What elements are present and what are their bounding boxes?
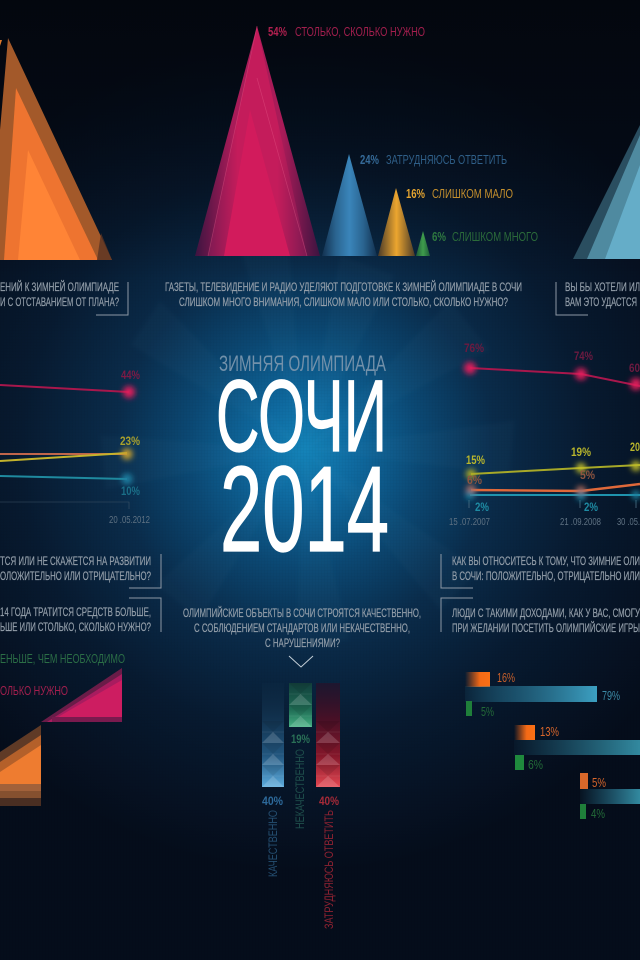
data labels: 23% <box>120 434 140 448</box>
chart: right blue triangle <box>573 125 640 259</box>
bar group: first: 16% <box>497 670 515 685</box>
question: left lower: ЬШЕ ИЛИ СТОЛЬКО, СКОЛЬКО НУЖНО? <box>0 620 151 634</box>
question: center lower: С СОБЛЮДЕНИЕМ СТАНДАРТОВ ИЛИ НЕКАЧЕСТВЕННО, <box>194 621 410 635</box>
line chart: right <box>449 341 640 528</box>
question: right middle <box>441 554 640 588</box>
bar: quality 40%: 40% <box>262 794 283 808</box>
label: 24%: 24% <box>360 152 379 167</box>
label: 16%: СЛИШКОМ МАЛО <box>432 186 513 201</box>
label: 24% <box>360 152 507 167</box>
data dots <box>122 386 135 484</box>
bar: quality 40% <box>262 683 284 877</box>
bar group: third: 4% <box>591 806 605 821</box>
bar: poor quality 19%: НЕКАЧЕСТВЕННО <box>293 749 307 829</box>
data labels: 19% <box>571 445 591 459</box>
label: 6%: СЛИШКОМ МНОГО <box>452 229 538 244</box>
question: right top <box>556 280 640 315</box>
bar: poor quality 19%: 19% <box>291 732 310 746</box>
bar: hard to say 40% <box>316 683 340 929</box>
bar group: third: 5% <box>592 775 606 790</box>
title <box>216 351 389 577</box>
label: 54%: 54% <box>268 24 287 39</box>
data labels: 10% <box>121 484 140 498</box>
chart: media coverage triangles <box>195 24 538 256</box>
label: 54%: СТОЛЬКО, СКОЛЬКО НУЖНО <box>295 24 425 39</box>
question: left top: ЕНИЙ К ЗИМНЕЙ ОЛИМПИАДЕ <box>0 279 119 294</box>
bar group: second <box>514 724 640 772</box>
date label: 20 .05.2012 <box>109 515 150 526</box>
date labels: 21 .09.2008 <box>560 517 601 528</box>
label: 16% <box>406 186 513 201</box>
bar group: first: 5% <box>481 704 494 719</box>
question: left middle: ОЛОЖИТЕЛЬНО ИЛИ ОТРИЦАТЕЛЬНО? <box>0 569 151 583</box>
triangle: 6% green <box>416 231 430 256</box>
bar: hard to say 40%: 40% <box>319 794 339 808</box>
label: as much as needed: ОЛЬКО НУЖНО <box>0 683 68 698</box>
question: left top: И С ОТСТАВАНИЕМ ОТ ПЛАНА? <box>0 295 119 309</box>
data labels: 44% <box>121 368 140 382</box>
label: 54% <box>268 24 425 39</box>
label: 6%: 6% <box>432 229 446 244</box>
question: left top <box>0 279 128 315</box>
question: center top <box>165 279 522 309</box>
bar group: second: 6% <box>528 757 543 772</box>
data labels: 5% <box>580 468 595 482</box>
date labels <box>449 517 640 528</box>
date labels: 15 .07.2007 <box>449 517 490 528</box>
triangle: 54% pink <box>195 26 320 256</box>
question: center lower: С НАРУШЕНИЯМИ? <box>265 636 340 650</box>
line chart: left <box>0 368 150 526</box>
data labels: 2% <box>475 500 489 514</box>
data labels: 2% <box>584 500 598 514</box>
bar group: second: 13% <box>540 724 559 739</box>
data labels <box>464 341 640 514</box>
data labels <box>120 368 140 498</box>
question: left middle <box>0 554 161 588</box>
chart: vertical bars <box>262 683 340 929</box>
bar: poor quality 19% <box>289 683 312 829</box>
data dots <box>464 362 640 500</box>
bar group: first <box>465 670 620 719</box>
label: 24%: ЗАТРУДНЯЮСЬ ОТВЕТИТЬ <box>386 152 507 167</box>
triangle: pink <box>41 668 122 722</box>
question: center lower <box>183 605 421 650</box>
chart: horizontal bars <box>465 670 640 821</box>
bar: hard to say 40%: ЗАТРУДНЯЮСЬ ОТВЕТИТЬ <box>322 810 336 929</box>
data labels: 15% <box>466 453 485 467</box>
bar group: first: 79% <box>602 688 620 703</box>
chart: left bottom triangles <box>0 651 125 806</box>
icon: chevron arrow <box>289 656 313 667</box>
data labels: 76% <box>464 341 484 355</box>
data labels: 74% <box>574 349 593 363</box>
question: left middle: ТСЯ ИЛИ НЕ СКАЖЕТСЯ НА РАЗВИТИИ <box>0 554 151 568</box>
triangle: orange <box>0 725 41 806</box>
title: ЗИМНЯЯ ОЛИМПИАДА <box>219 351 386 376</box>
label: less than necessary: ЕНЬШЕ, ЧЕМ НЕОБХОДИМО <box>0 651 125 666</box>
title: 2014 <box>220 441 389 577</box>
chart: left orange triangle <box>0 38 112 260</box>
bar group: third <box>580 773 640 821</box>
triangle: 24% blue <box>322 154 377 256</box>
label: 16%: 16% <box>406 186 425 201</box>
question: center lower: ОЛИМПИЙСКИЕ ОБЪЕКТЫ В СОЧИ СТРОЯТСЯ КАЧЕСТВЕННО, <box>183 605 421 620</box>
question: left lower <box>0 598 161 634</box>
title: СОЧИ <box>216 359 387 473</box>
question: right lower <box>441 598 640 635</box>
question: left lower: 14 ГОДА ТРАТИТСЯ СРЕДСТВ БОЛЬШЕ, <box>0 605 151 619</box>
data labels: 6% <box>467 473 482 487</box>
triangle: 16% yellow <box>378 188 415 256</box>
label: 6% <box>432 229 538 244</box>
bar: quality 40%: КАЧЕСТВЕННО <box>266 810 280 877</box>
